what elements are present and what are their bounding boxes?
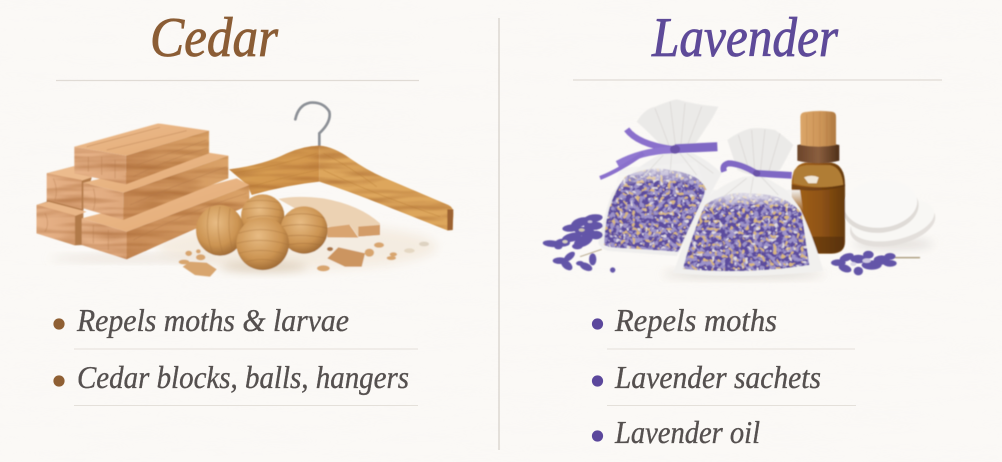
bullet list: cedar [53,302,418,406]
bottom left block [37,202,87,216]
icon: wood chips [179,242,429,277]
item: lavender oil: Lavender oil [614,414,760,450]
cedar title: Cedar [150,7,278,69]
illustration: lavender sachets, oil bottle and discs [542,99,939,277]
icon: cedar balls [196,194,328,270]
icon: wooden hanger [229,103,453,230]
icon: back sachet [598,99,722,256]
icon: amber oil bottle [792,111,845,254]
icon: cotton discs [840,176,939,254]
center divider [498,18,500,450]
middle long block [83,153,228,193]
block shadow underlay [37,166,92,245]
lavender title: Lavender [651,7,838,69]
icon: back ribbon bow [600,129,717,178]
item: cedar blocks, balls, hangers: Cedar blocks, balls, hangers [77,359,409,395]
icon: sawdust cedar piece [278,197,380,238]
middle left block [47,166,92,181]
icon: lavender sprigs [542,213,920,275]
item: repels moths: Repels moths [614,302,777,338]
bottom long block [82,178,249,232]
icon: front ribbon [723,163,792,177]
item: repels moths and larvae: Repels moths & larvae [76,302,349,338]
illustration: cedar blocks, balls and hanger [37,103,453,277]
panel: cedar [37,7,453,406]
bullet list: lavender [592,302,856,450]
icon: front sachet [673,128,823,276]
panel: lavender [542,7,942,450]
top block [74,123,209,156]
item: lavender sachets: Lavender sachets [614,359,821,395]
icon: stacked cedar blocks [37,123,249,259]
